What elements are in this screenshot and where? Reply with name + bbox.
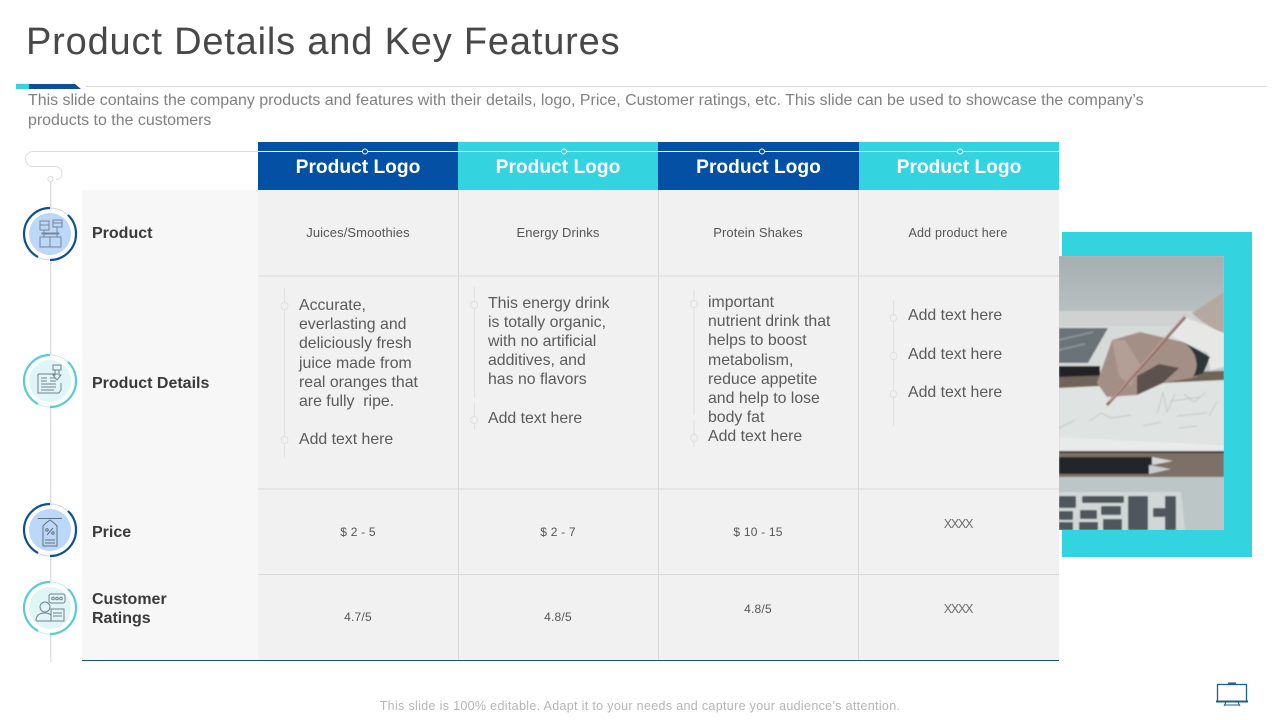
label: customer ratings: Customer bbox=[92, 591, 167, 608]
details column 2: with no artificial bbox=[488, 333, 596, 350]
details column 4: Add text here bbox=[908, 346, 1002, 362]
details column 3 bbox=[708, 294, 830, 445]
details column 1 bbox=[298, 297, 418, 448]
header: product logo 3 bbox=[658, 142, 859, 190]
details column 3: body fat bbox=[708, 409, 764, 426]
details column 1: Add text here bbox=[299, 431, 393, 448]
details column 2: is totally organic, bbox=[488, 314, 606, 331]
details column 3: and help to lose bbox=[708, 390, 820, 407]
details column 3: metabolism, bbox=[708, 352, 793, 369]
rating 3: 4.8/5 bbox=[744, 602, 772, 616]
photo: hand writing at a desk bbox=[1059, 256, 1224, 530]
details column 1: everlasting and bbox=[299, 316, 406, 333]
label: customer ratings bbox=[92, 591, 167, 627]
details column 1: juice made from bbox=[299, 355, 412, 372]
header: product logo 2 bbox=[458, 142, 658, 190]
price 2: $ 2 - 7 bbox=[540, 525, 576, 539]
title: Product Details and Key Features bbox=[26, 21, 620, 63]
details column 3: Add text here bbox=[708, 428, 802, 445]
icon: product boxes bbox=[22, 206, 78, 262]
table body bbox=[258, 190, 1059, 660]
label: product: Product bbox=[92, 225, 152, 242]
footer note: This slide is 100% editable. Adapt it to your needs and capture your audience's attention. bbox=[380, 699, 900, 713]
details column 2: Add text here bbox=[488, 410, 582, 426]
details column 3: reduce appetite bbox=[708, 371, 817, 388]
details column 1: deliciously fresh bbox=[299, 335, 412, 352]
header: product logo 1 bbox=[258, 142, 458, 190]
details column 2 bbox=[488, 295, 610, 426]
icon: price tag bbox=[22, 502, 78, 558]
price 4: XXXX bbox=[944, 517, 972, 531]
rating 4: XXXX bbox=[944, 602, 972, 616]
description: This slide contains the company products and features with their details, logo, Price, Customer ratings, etc. This slide can be used to showcase the company’s bbox=[28, 92, 1144, 109]
table bottom rule bbox=[82, 660, 1059, 661]
details column 1: Accurate, bbox=[299, 297, 366, 314]
header: product logo 3: Product Logo bbox=[696, 157, 821, 178]
icon: presentation board bbox=[1216, 682, 1248, 706]
cell: juices/smoothies: Juices/Smoothies bbox=[306, 225, 410, 240]
details column 1: real oranges that bbox=[299, 374, 418, 391]
teal photo backdrop bbox=[1062, 232, 1252, 557]
icon: customer ratings bbox=[22, 580, 78, 636]
icon: product details document bbox=[22, 354, 78, 408]
description bbox=[28, 92, 1144, 128]
details column 4 bbox=[908, 307, 1002, 401]
label: customer ratings: Ratings bbox=[92, 610, 151, 627]
header: product logo 1: Product Logo bbox=[296, 157, 420, 178]
price 1: $ 2 - 5 bbox=[340, 525, 376, 539]
details column 3: nutrient drink that bbox=[708, 313, 830, 330]
bullet rails bbox=[280, 287, 898, 458]
cell: energy drinks: Energy Drinks bbox=[517, 225, 599, 240]
rating 2: 4.8/5 bbox=[544, 610, 572, 624]
price 3: $ 10 - 15 bbox=[733, 525, 783, 539]
table grid lines bbox=[258, 190, 1059, 660]
header: product logo 4 bbox=[859, 142, 1059, 190]
header: product logo 2: Product Logo bbox=[496, 157, 620, 178]
details column 3: important bbox=[708, 294, 774, 311]
details column 2: additives, and bbox=[488, 352, 586, 369]
details column 4: Add text here bbox=[908, 384, 1002, 401]
timeline connector bbox=[25, 148, 1059, 662]
row label column bbox=[82, 190, 258, 660]
details column 2: This energy drink bbox=[488, 295, 610, 312]
description: products to the customers bbox=[28, 112, 211, 128]
rating 1: 4.7/5 bbox=[344, 610, 372, 624]
label: product details: Product Details bbox=[92, 375, 209, 392]
cell: add product: Add product here bbox=[908, 226, 1008, 240]
details column 4: Add text here bbox=[908, 307, 1002, 324]
details column 1: are fully ripe. bbox=[299, 393, 394, 410]
label: price: Price bbox=[92, 524, 131, 541]
details column 2: has no flavors bbox=[488, 371, 587, 388]
header: product logo 4: Product Logo bbox=[897, 157, 1021, 178]
cell: protein shakes: Protein Shakes bbox=[713, 225, 803, 240]
details column 3: helps to boost bbox=[708, 332, 807, 349]
title accent rule bbox=[16, 84, 1267, 89]
